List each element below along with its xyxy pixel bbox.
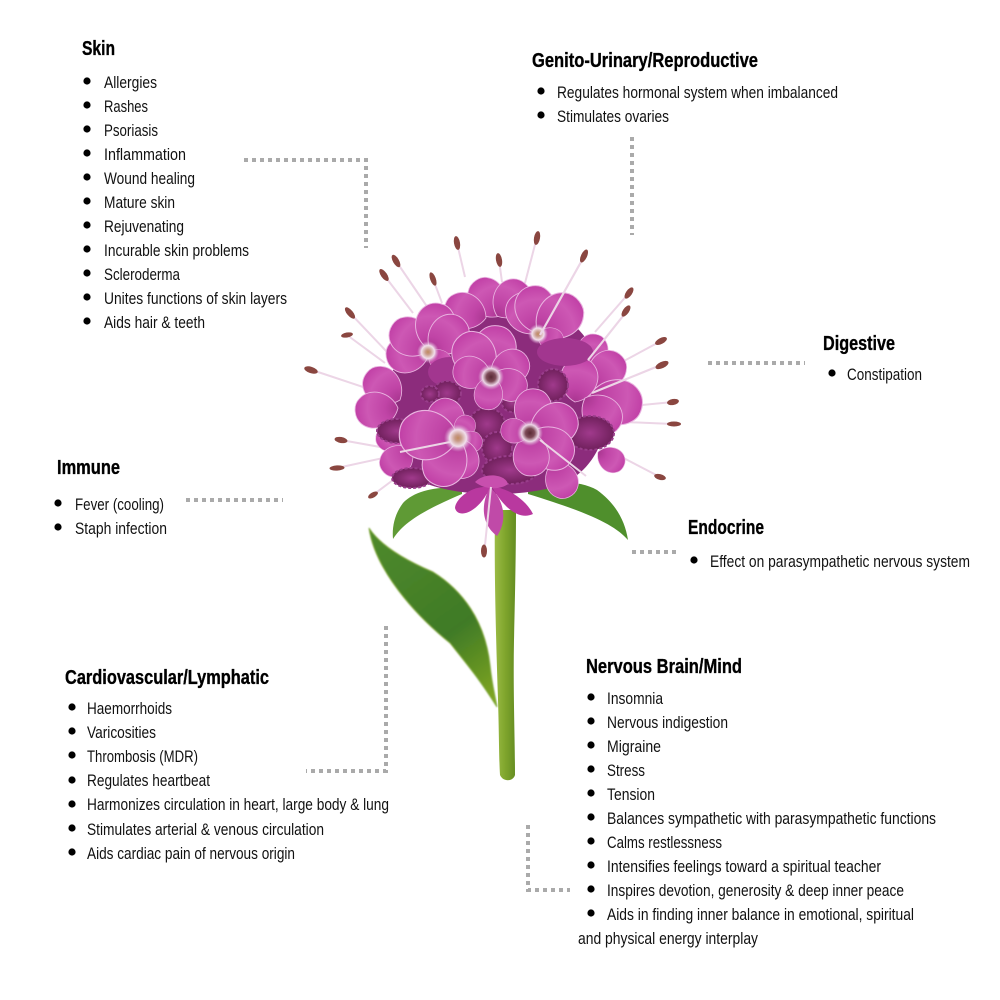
panel: nervous brain/mind [578,656,936,948]
panel: immune [54,457,167,538]
list: skin: Aids hair & teeth [104,314,205,332]
list: skin: Psoriasis [104,122,158,140]
list: cardiovascular: Harmonizes circulation in heart, large body & lung [87,796,389,814]
list: skin: Incurable skin problems [104,242,249,260]
heading: digestive: Digestive [823,333,895,355]
list: immune: Staph infection [75,520,167,538]
list: skin: Rejuvenating [104,218,184,236]
lower right flower [499,387,586,479]
bottom flower [455,475,533,558]
heading: cardiovascular: Cardiovascular/Lymphatic [65,667,269,689]
list: skin: Scleroderma [104,266,181,284]
list: nervous brain/mind: Nervous indigestion [607,714,728,732]
list: skin: Rashes [104,98,148,116]
flower head base [388,297,607,494]
heading: skin: Skin [82,38,115,60]
list: nervous brain/mind: Balances sympathetic with parasympathetic functions [607,810,936,828]
flower buds [377,369,614,488]
list: skin: Wound healing [104,170,195,188]
panel: skin [82,38,287,332]
foreground stamens [540,248,670,393]
connector: immune [186,498,283,502]
list: nervous brain/mind: Stress [607,762,645,780]
list: genito-urinary [537,84,838,126]
list: genito-urinary: Stimulates ovaries [557,108,669,126]
list: cardiovascular: Regulates heartbeat [87,772,210,790]
list: nervous brain/mind [578,690,936,948]
list: nervous brain/mind: Aids in finding inner balance in emotional, spiritual [607,906,914,924]
connector: genito-urinary [630,137,634,235]
list: nervous brain/mind: Migraine [607,738,661,756]
list: nervous brain/mind: Insomnia [607,690,664,708]
list: nervous brain/mind: Tension [607,786,655,804]
list: skin: Inflammation [104,146,186,164]
list: nervous brain/mind: Intensifies feelings toward a spiritual teacher [607,858,881,876]
center flower [443,323,535,412]
list: digestive: Constipation [847,366,922,384]
stamens [303,231,681,500]
list: cardiovascular: Thrombosis (MDR) [87,748,198,766]
stem [495,510,516,780]
upper left flower [382,299,477,376]
heading: nervous brain/mind: Nervous Brain/Mind [586,656,742,678]
lower left flower [397,392,485,494]
panel: endocrine [688,517,970,571]
list: cardiovascular [68,700,389,863]
heading: immune: Immune [57,457,120,479]
list: genito-urinary: Regulates hormonal system when imbalanced [557,84,838,102]
lower leaf [369,528,497,707]
list: skin: Unites functions of skin layers [104,290,287,308]
list: cardiovascular: Varicosities [87,724,156,742]
list: nervous brain/mind: Inspires devotion, generosity & deep inner peace [607,882,904,900]
plant illustration [303,231,681,780]
list: nervous brain/mind: and physical energy interplay [578,930,759,948]
panel: genito-urinary [532,50,838,126]
panel: digestive [823,333,922,384]
heading: endocrine: Endocrine [688,517,764,539]
back petals [354,270,647,504]
list: skin: Mature skin [104,194,175,212]
upper right leaf [528,482,628,540]
upper right flower [498,283,592,355]
upper left leaf [393,488,462,539]
list: cardiovascular: Aids cardiac pain of nervous origin [87,845,295,863]
list: nervous brain/mind: Calms restlessness [607,834,722,852]
connector: nervous [528,825,570,890]
list: cardiovascular: Stimulates arterial & venous circulation [87,821,324,839]
list: immune [54,496,167,538]
panel: cardiovascular [65,667,389,863]
connector: digestive [708,361,805,365]
connector: endocrine [632,550,676,554]
list: skin [83,74,287,332]
list: immune: Fever (cooling) [75,496,164,514]
list: cardiovascular: Haemorrhoids [87,700,172,718]
connector: skin [244,160,366,248]
connector: cardiovascular [306,626,386,771]
list: skin: Allergies [104,74,157,92]
heading: genito-urinary: Genito-Urinary/Reproductive [532,50,758,72]
flower tube shading [428,338,593,387]
